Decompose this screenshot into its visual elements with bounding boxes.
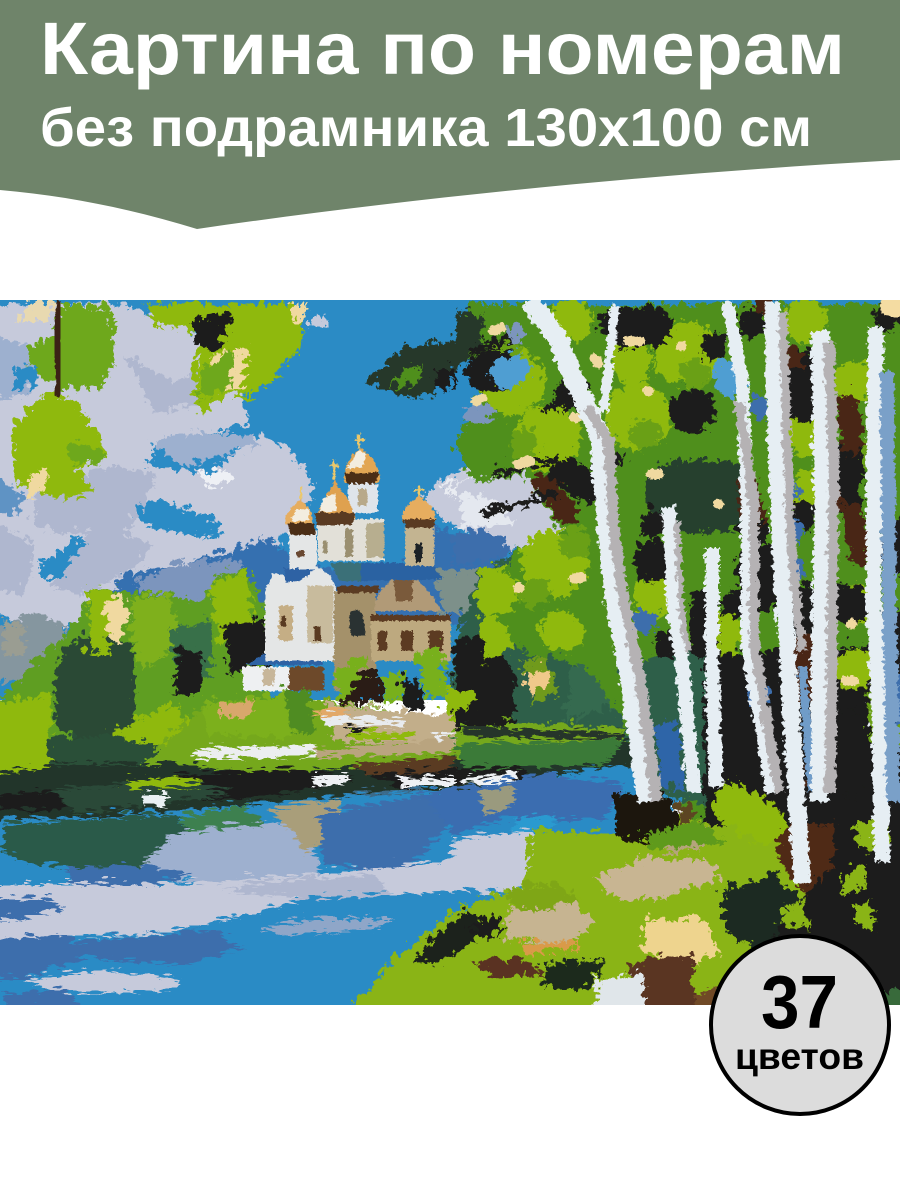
shoreline [0,703,640,830]
mountains [112,524,507,633]
badge number: 37 [761,960,838,1044]
foliage right: base [450,300,900,820]
onion domes [343,447,378,482]
right facade [370,617,450,660]
shrubs and banks by church [140,638,630,775]
clouds [0,300,560,680]
branch top left [55,300,60,395]
badge circle [711,936,889,1114]
foliage: branch dark [363,305,480,395]
foliage: highlights [475,305,898,680]
foliage top left [8,300,302,495]
water [0,760,690,1010]
badge label: цветов [735,1036,864,1077]
banner: green ribbon header [0,0,900,229]
sky [0,300,900,700]
distant trees left [0,564,278,775]
towers [288,530,316,568]
birch trunks [527,298,892,880]
right bank and path [351,790,900,1005]
painting: church by a river with birches [0,298,900,1010]
middle section [333,590,375,690]
church [242,433,450,690]
foliage: dabs [470,300,890,820]
main white facade [264,565,336,660]
crosses [300,433,423,498]
distant trees right [446,549,630,742]
title: Картина по номерам [40,7,845,90]
subtitle: без подрамника 130х100 см [40,98,812,158]
badge: 37 colours [711,936,889,1114]
wing roof [246,653,324,666]
central blue roof [347,562,442,580]
